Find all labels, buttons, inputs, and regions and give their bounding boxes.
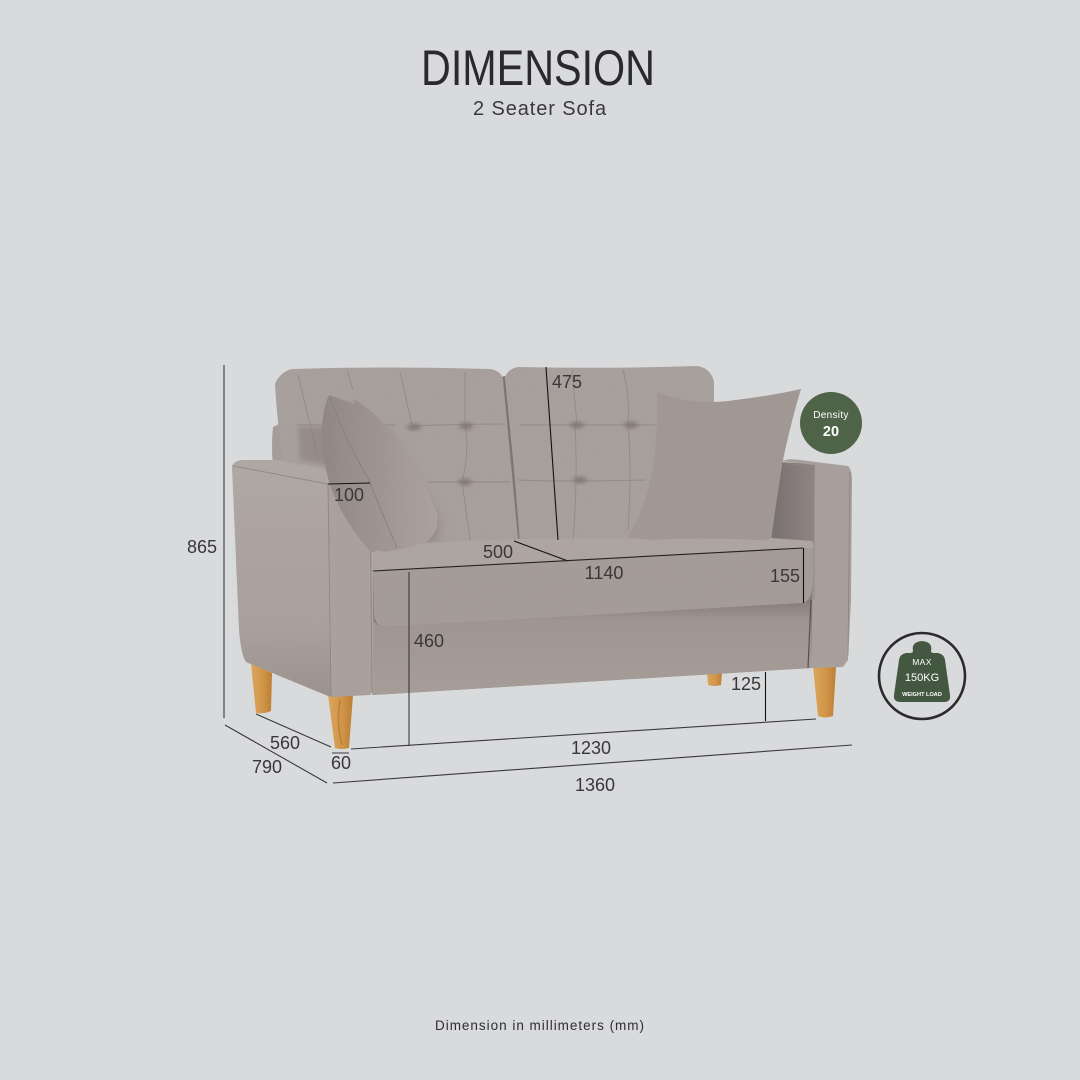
weight load icon: WEIGHT LOAD bbox=[902, 692, 942, 698]
pillow right bbox=[628, 389, 801, 540]
dimension label: 790: 790 bbox=[252, 757, 282, 777]
subtitle: 2 Seater Sofa bbox=[473, 98, 607, 120]
sofa illustration bbox=[232, 366, 852, 749]
wooden legs bbox=[251, 664, 836, 749]
dimension label: 1230: 1230 bbox=[571, 738, 611, 758]
left arm bbox=[232, 460, 374, 697]
dimension label: 125: 125 bbox=[731, 674, 761, 694]
dimension label: 155: 155 bbox=[770, 566, 800, 586]
small back lump bbox=[272, 422, 290, 466]
dimension label: 1360: 1360 bbox=[575, 775, 615, 795]
back cushion right bbox=[505, 366, 780, 545]
dimension label: 560: 560 bbox=[270, 733, 300, 753]
density badge: Density bbox=[813, 410, 849, 421]
right arm bbox=[781, 459, 852, 668]
density badge bbox=[800, 392, 862, 454]
title: DIMENSION bbox=[421, 40, 655, 96]
dimension label: 1140: 1140 bbox=[585, 563, 623, 583]
footer note: Dimension in millimeters (mm) bbox=[435, 1018, 644, 1033]
dimension label: 865: 865 bbox=[187, 537, 217, 557]
weight load icon: MAX bbox=[912, 657, 932, 667]
dimension lines bbox=[224, 365, 852, 783]
sofa body underlay bbox=[372, 538, 815, 695]
sofa base front bbox=[372, 600, 811, 695]
density badge: 20 bbox=[823, 424, 839, 440]
weight load icon: 150KG bbox=[905, 672, 939, 684]
seat cushion top bbox=[373, 538, 816, 573]
dimension label: 475: 475 bbox=[552, 372, 582, 392]
back shadow underlay bbox=[285, 376, 522, 548]
dimension label: 100: 100 bbox=[334, 485, 364, 505]
dimension label: 500: 500 bbox=[483, 542, 513, 562]
pillow left bbox=[322, 395, 438, 553]
back cushion left bbox=[275, 368, 518, 545]
right arm inner bbox=[771, 462, 815, 548]
dimension label: 60: 60 bbox=[331, 753, 351, 773]
dimension label: 460: 460 bbox=[414, 631, 444, 651]
seat cushion front bbox=[373, 548, 815, 627]
weight load icon bbox=[879, 633, 965, 719]
